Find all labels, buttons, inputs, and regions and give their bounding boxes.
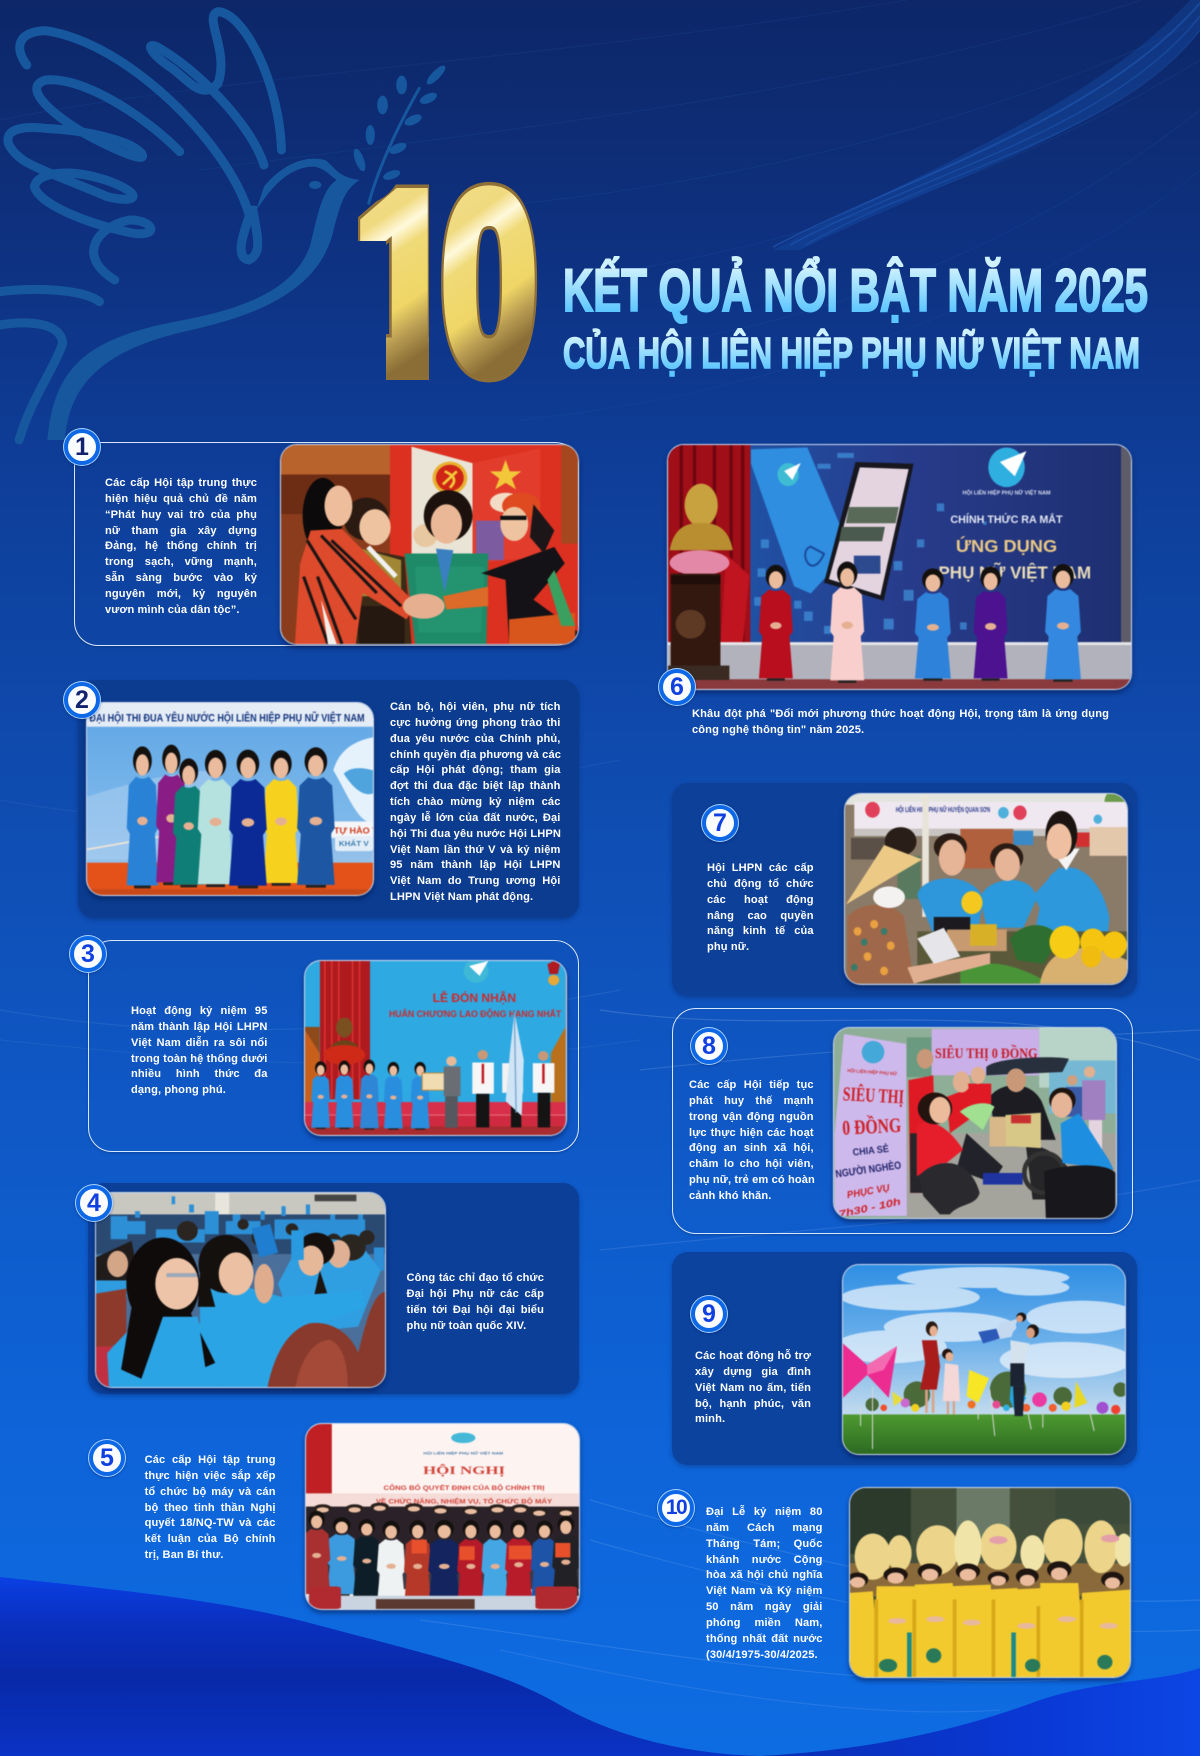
text 2: tích chào mừng kỷ niệm các: [390, 796, 560, 808]
text 7: năng kinh tế của: [707, 925, 814, 937]
badge 10: [658, 1490, 694, 1526]
text 7: các hoạt động: [707, 894, 814, 906]
photo 9: family with pinwheels: [842, 1264, 1126, 1455]
badge 6: 6: [670, 673, 684, 701]
text 10: 50 năm ngày giải: [706, 1601, 822, 1613]
bottom wave: right: [760, 1668, 1200, 1756]
text 5: quyết 18/NQ-TW và các: [145, 1517, 276, 1529]
text 2: chính quyền địa phương và các: [390, 749, 561, 761]
text 2: Việt Nam lần thứ V và kỷ niệm: [390, 844, 560, 856]
photo 7: farmers market: HỘI LIÊN HIỆP PHỤ NỮ HUYỆN QUAN SƠN: [896, 805, 990, 814]
text 5: bộ theo tinh thần Nghị: [145, 1502, 276, 1514]
badge 3: [70, 936, 106, 972]
text 9: Các hoạt động hỗ trợ: [695, 1350, 811, 1362]
panel 7 background: [672, 783, 1137, 996]
text 9: minh.: [695, 1413, 725, 1425]
photo 6: app launch stage: CHÍNH THỨC RA MẮT: [950, 512, 1063, 526]
photo 8: zero dong market: NGƯỜI NGHÈO: [835, 1158, 902, 1181]
text 4: Đại hội Phụ nữ các cấp: [406, 1288, 544, 1300]
text 5: thực hiện việc sắp xếp: [145, 1470, 276, 1482]
text 1: trong sạch, vững mạnh,: [105, 556, 257, 568]
text 3: Hoạt động kỷ niệm 95: [131, 1005, 268, 1017]
text 1: vươn mình của dân tộc”.: [105, 604, 240, 616]
badge 9: 9: [702, 1300, 716, 1328]
photo 1: women joining hands: [280, 444, 579, 645]
badge 7: [702, 805, 738, 841]
panel 4 background: [88, 1183, 579, 1394]
text 2: đua yêu nước của Chính phủ,: [390, 733, 560, 745]
photo 8: zero dong market: SIÊU THỊ 0 ĐỒNG: [935, 1044, 1038, 1062]
photo 3: award ceremony: [304, 960, 566, 1136]
text 2: cực hưởng ứng phong trào thi: [390, 717, 560, 729]
text 4: Công tác chỉ đạo tổ chức: [406, 1272, 544, 1284]
text 2: ngày lễ lớn của đất nước, Đại: [390, 812, 560, 824]
photo 2: seven women in ao dai: KHÁT V: [339, 839, 369, 848]
text 10: phóng miền Nam,: [706, 1617, 822, 1629]
panel 10: [656, 1486, 1134, 1684]
text 1: Các cấp Hội tập trung thực: [105, 477, 257, 489]
text 8: cảnh khó khăn.: [689, 1190, 771, 1202]
text 10: Đại Lễ kỷ niệm 80: [706, 1506, 822, 1518]
big gold number 10: [358, 182, 538, 382]
photo 8: zero dong market: [833, 1027, 1117, 1219]
text 2: hội Thi đua yêu nước Hội LHPN: [390, 828, 561, 840]
badge 7: 7: [713, 809, 727, 837]
photo 6: app launch stage: ỨNG DỤNG: [956, 536, 1057, 556]
text 4: tiến tới Đại hội đại biểu: [406, 1304, 544, 1316]
text 1: sẵn sàng bước vào kỷ: [105, 572, 257, 584]
text 5: trị, Ban Bí thư.: [145, 1549, 224, 1561]
panel 3 outline: [88, 940, 579, 1152]
text 8: lực thực hiện các hoạt: [689, 1127, 814, 1139]
text 10: hòa xã hội chủ nghĩa: [706, 1569, 822, 1581]
text 10: [706, 1505, 822, 1661]
panel 6: [658, 443, 1134, 736]
text 8: phụ nữ, trẻ em có hoàn: [689, 1174, 815, 1186]
badge 2: 2: [75, 686, 89, 714]
text 6: [692, 708, 1109, 736]
text 10: (30/4/1975-30/4/2025.: [706, 1649, 818, 1661]
text 8: động an sinh xã hội,: [689, 1142, 814, 1154]
text 2: cấp Hội phát động; tham gia: [390, 764, 560, 776]
text 5: tổ chức bộ máy và cán: [145, 1486, 276, 1498]
text 10: Việt Nam và Kỷ niệm: [706, 1585, 822, 1597]
text 3: nhiều hình thức đa: [131, 1068, 268, 1080]
badge 8: [691, 1028, 727, 1064]
badge 8: 8: [702, 1032, 716, 1060]
badge 5: [89, 1440, 125, 1476]
panel 2 background: [78, 680, 579, 918]
text 6: công nghệ thông tin" năm 2025.: [692, 724, 864, 736]
photo 8: zero dong market: 0 ĐỒNG: [842, 1113, 902, 1140]
photo 5: conference group: [304, 1423, 580, 1610]
text 4: [406, 1272, 544, 1332]
photo 3: award ceremony: LỄ ĐÓN NHẬN: [433, 991, 516, 1005]
text 5: kết luận của Bộ chính: [145, 1533, 276, 1545]
text 2: 95 năm thành lập Hội LHPN: [390, 859, 560, 871]
badge 4: 4: [87, 1189, 101, 1217]
text 4: phụ nữ toàn quốc XIV.: [406, 1320, 526, 1332]
photo 6: app launch stage: PHỤ NỮ VIỆT NAM: [938, 562, 1091, 583]
panel 1 outline: [74, 442, 579, 646]
text 1: nữ tham gia xây dựng: [105, 525, 257, 537]
photo 10: women in yellow with fans: [849, 1487, 1131, 1678]
text 9: [695, 1349, 811, 1425]
text 3: [131, 1005, 268, 1096]
panel 4: [74, 1183, 581, 1398]
photo 8: zero dong market: HỘI LIÊN HIỆP PHỤ NỮ: [847, 1066, 897, 1076]
text 5: Các cấp Hội tập trung: [145, 1454, 276, 1466]
text 3: trong toàn hệ thống dưới: [131, 1053, 268, 1065]
photo 8: zero dong market: CHIA SẺ: [852, 1143, 890, 1159]
text 9: xây dựng gia đình: [695, 1366, 811, 1378]
panel 5: [87, 1422, 583, 1616]
panel 1: [62, 428, 582, 650]
text 5: [144, 1454, 276, 1561]
badge 10: 10: [666, 1496, 686, 1519]
text 10: thống nhất đất nước: [706, 1633, 822, 1645]
photo 2: seven women in ao dai: [86, 702, 374, 896]
photo 7: farmers market: [844, 793, 1128, 984]
panel 8 outline: [672, 1008, 1133, 1234]
panel 7: [670, 783, 1139, 1000]
badge 5: 5: [100, 1444, 114, 1472]
panel 8: [671, 1008, 1134, 1236]
text 10: năm Cách mạng: [706, 1522, 822, 1534]
photo 4: delegates raising cards: [95, 1192, 386, 1388]
text 3: Việt Nam diễn ra sôi nổi: [131, 1037, 268, 1049]
text 9: Việt Nam no ấm, tiến: [695, 1382, 811, 1394]
photo 5: conference group: HỘI LIÊN HIỆP PHỤ NỮ VIỆT NAM: [423, 1450, 503, 1456]
text 9: bộ, hạnh phúc, văn: [695, 1398, 811, 1410]
badge 1: [64, 429, 100, 465]
text 2: đợt thi đua đặc biệt lập thành: [390, 780, 560, 792]
text 2: Việt Nam do Trung ương Hội: [390, 875, 560, 887]
photo 5: conference group: HỘI NGHỊ: [422, 1463, 505, 1477]
text 8: Các cấp Hội tiếp tục: [689, 1079, 814, 1091]
text 7: chủ động tổ chức: [707, 878, 814, 890]
badge 9: [691, 1296, 727, 1332]
text 7: Hội LHPN các cấp: [707, 862, 814, 874]
title: [358, 170, 1148, 395]
text 2: LHPN Việt Nam phát động.: [390, 891, 533, 903]
panel 9 background: [672, 1252, 1137, 1465]
text 3: dạng, phong phú.: [131, 1084, 226, 1096]
text 6: Khâu đột phá "Đổi mới phương thức hoạt động Hội, trọng tâm là ứng dụng: [692, 708, 1109, 720]
text 3: năm thành lập Hội LHPN: [131, 1021, 268, 1033]
badge 4: [76, 1185, 112, 1221]
text 8: trong vận động nguồn: [689, 1111, 814, 1123]
text 7: [707, 862, 814, 953]
text 8: phát huy thế mạnh: [689, 1095, 814, 1107]
text 10: khánh nước Cộng: [706, 1554, 822, 1566]
text 2: Cán bộ, hội viên, phụ nữ tích: [390, 701, 560, 713]
photo 8: zero dong market: PHỤC VỤ: [846, 1183, 891, 1201]
photo 6: app launch stage: [667, 444, 1132, 690]
text 7: phụ nữ.: [707, 941, 749, 953]
text 1: Đảng, hệ thống chính trị: [105, 540, 257, 552]
photo 6: app launch stage: HỘI LIÊN HIỆP PHỤ NỮ VIỆT NAM: [963, 488, 1051, 496]
photo 8: zero dong market: SIÊU THỊ: [842, 1083, 905, 1108]
badge 1: 1: [75, 433, 89, 461]
panel 9: [670, 1252, 1139, 1469]
text 10: Tháng Tám; Quốc: [706, 1538, 822, 1550]
text 1: [105, 477, 257, 616]
text 7: nâng cao quyền: [707, 910, 814, 922]
text 1: hiện hiệu quả chủ đề năm: [105, 493, 257, 505]
badge 2: [64, 682, 100, 718]
text 8: [689, 1079, 815, 1202]
badge 3: 3: [81, 940, 95, 968]
text 2: [390, 701, 561, 903]
badge 6: [659, 669, 695, 705]
dove: [0, 12, 449, 440]
text 8: chăm lo cho hội viên,: [689, 1158, 814, 1170]
text 1: nguyên mới, kỷ nguyên: [105, 588, 257, 600]
text 1: “Phát huy vai trò của phụ: [105, 509, 257, 521]
bottom wave: left: [0, 1577, 770, 1756]
panel 2: [62, 680, 580, 922]
panel 3: [68, 935, 580, 1154]
